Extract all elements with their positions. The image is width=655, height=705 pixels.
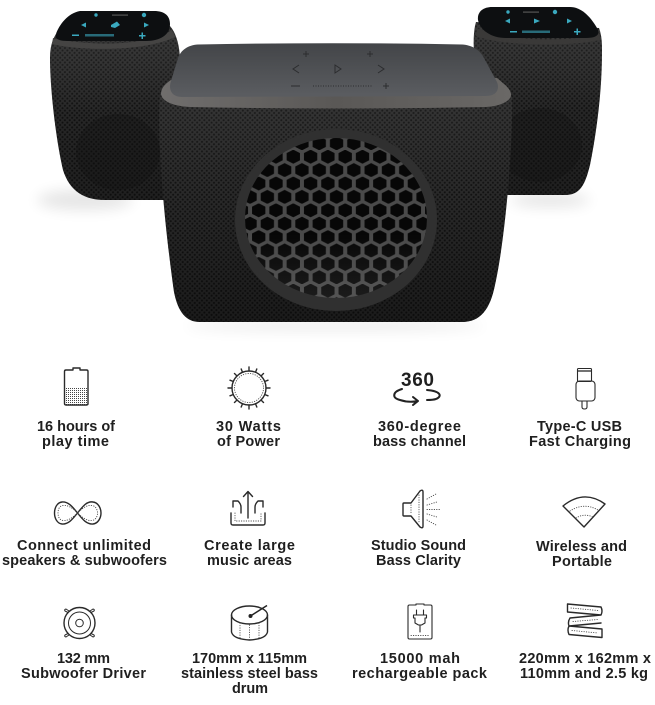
label — [37, 419, 115, 450]
feature: battery pack — [352, 604, 488, 682]
feature: bass drum — [181, 606, 318, 697]
icon: drum and stick — [232, 606, 268, 640]
right panel controls — [505, 10, 580, 35]
bass grille holes — [245, 138, 427, 298]
label: Studio Sound — [371, 538, 466, 554]
label: 170mm x 115mm — [192, 651, 307, 667]
label — [536, 539, 627, 570]
icon: signal wedge — [563, 497, 605, 527]
main subwoofer speaker — [159, 43, 512, 322]
feature: studio sound — [371, 490, 466, 569]
icon: 360 rotate: 360 — [401, 370, 434, 391]
main body fabric — [159, 94, 512, 322]
label: Portable — [552, 554, 612, 570]
label: Subwoofer Driver — [21, 666, 146, 682]
icon: battery — [64, 368, 88, 405]
label — [529, 419, 631, 450]
label: Bass Clarity — [376, 553, 461, 569]
speaker product photo — [37, 7, 602, 330]
label: 132 mm — [57, 651, 110, 667]
top controls — [291, 51, 389, 89]
label — [371, 538, 466, 569]
label — [519, 651, 651, 682]
icon: rechargeable pack — [408, 604, 432, 639]
label: stainless steel bass — [181, 666, 318, 682]
floor shadows — [37, 190, 590, 330]
feature: 360 bass — [373, 370, 466, 450]
icon: arrows from tray — [231, 492, 265, 525]
feature: driver — [21, 608, 146, 682]
right touch panel — [478, 7, 598, 38]
feature: dimensions — [519, 604, 651, 682]
label: Fast Charging — [529, 434, 631, 450]
label: 30 Watts — [216, 419, 281, 435]
label: 110mm and 2.5 kg — [520, 666, 648, 682]
label: bass channel — [373, 434, 466, 450]
label — [373, 419, 466, 450]
icon: sun burst — [228, 367, 270, 409]
label: Create large — [204, 538, 295, 554]
feature: music areas — [204, 492, 295, 569]
label: 16 hours of — [37, 419, 115, 435]
label: rechargeable pack — [352, 666, 488, 682]
right satellite speaker — [474, 7, 602, 195]
icon: subwoofer driver — [64, 608, 95, 638]
label — [181, 651, 318, 697]
icon: loudspeaker — [403, 490, 440, 528]
label: Type-C USB — [537, 419, 622, 435]
metal rim — [161, 78, 511, 108]
icon: infinity — [54, 502, 101, 524]
label: Wireless and — [536, 539, 627, 555]
icon: tape measure — [568, 604, 602, 638]
label: play time — [42, 434, 109, 450]
label — [2, 538, 167, 569]
glass top — [170, 43, 498, 97]
label: Connect unlimited — [17, 538, 151, 554]
left panel controls — [72, 13, 149, 39]
label: 15000 mah — [380, 651, 460, 667]
feature: power — [216, 367, 281, 450]
icon: USB-C plug — [576, 368, 595, 409]
left satellite speaker — [50, 11, 180, 200]
label: drum — [232, 681, 268, 697]
label: speakers & subwoofers — [2, 553, 167, 569]
label — [21, 651, 146, 682]
label — [204, 538, 295, 569]
feature: wireless — [536, 497, 627, 570]
left touch panel — [56, 11, 170, 41]
feature: unlimited speakers — [2, 502, 167, 569]
feature: USB-C — [529, 368, 631, 450]
label: music areas — [207, 553, 292, 569]
feature: battery life — [37, 368, 115, 450]
label: of Power — [217, 434, 280, 450]
label: 220mm x 162mm x — [519, 651, 651, 667]
label — [352, 651, 488, 682]
label: 360-degree — [378, 419, 461, 435]
label — [216, 419, 281, 450]
bass grille ring — [235, 129, 437, 311]
